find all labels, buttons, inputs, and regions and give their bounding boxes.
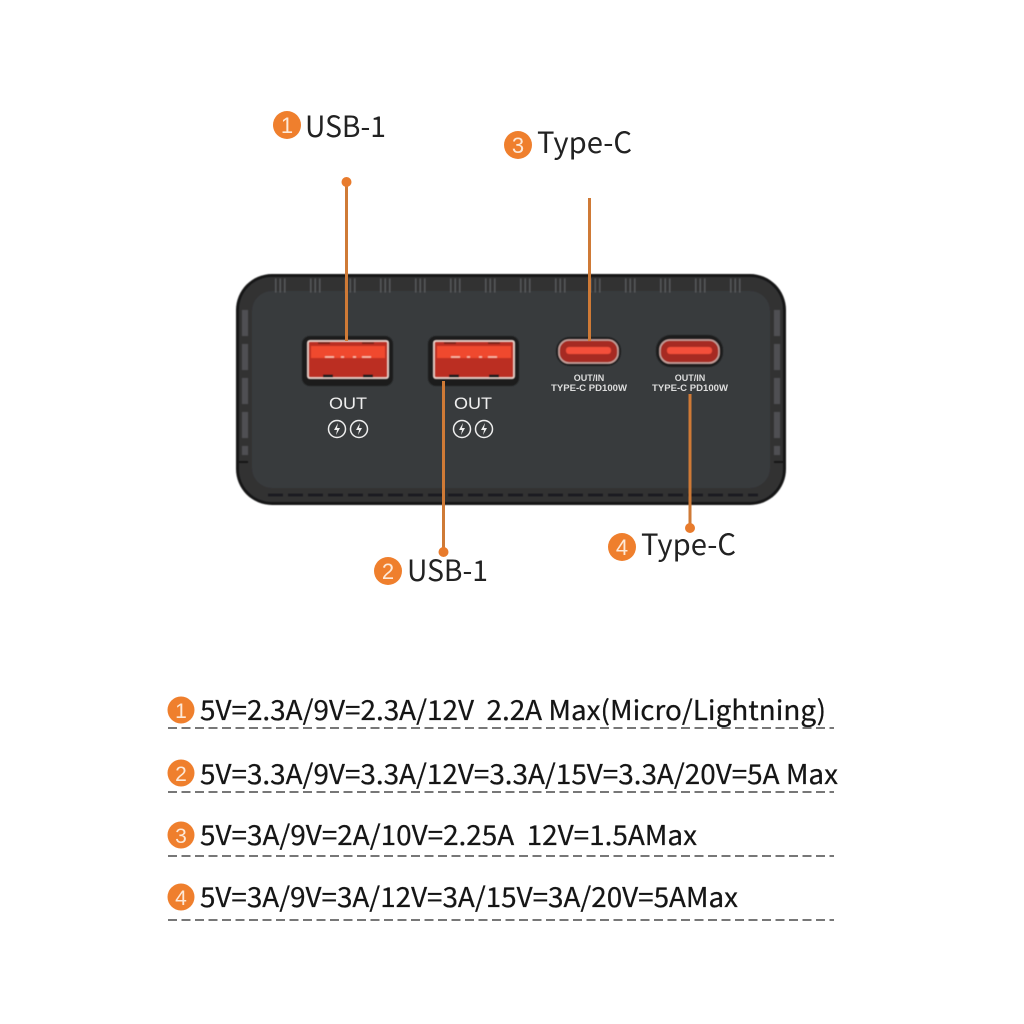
Type-C port label 1: TYPE-C PD100W [551,383,628,393]
label 2 USB-1 [374,548,488,590]
USB port 2 [428,336,519,386]
Type-C port 1 [556,337,621,366]
spec row 4 [168,876,834,920]
callout line 2 [438,381,448,557]
label 1 USB-1: USB-1 [305,104,386,146]
spec row 2: 2 [175,763,187,786]
callout line 4 [685,394,695,533]
Type-C port label 2: TYPE-C PD100W [652,383,729,393]
USB port label 2: OUT [454,394,492,413]
spec row 1: 1 [175,700,187,723]
spec row 3: 5V=3A/9V=2A/10V=2.25A 12V=1.5AMax [200,814,698,853]
Type-C port label 1: OUT/IN [574,373,604,383]
spec row 2: 5V=3.3A/9V=3.3A/12V=3.3A/15V=3.3A/20V=5A Max [200,753,839,792]
callout line 1 [342,177,352,341]
USB port label 1 [328,394,368,438]
Type-C port label 2: OUT/IN [675,373,705,383]
label 2 USB-1: 2 [382,559,394,584]
label 3 Type-C: Type-C [537,120,632,162]
label 1 USB-1: 1 [281,113,293,138]
spec row 3 [168,814,834,856]
label 4 Type-C: 4 [616,535,628,560]
label 3 Type-C: 3 [512,133,524,158]
spec row 3: 3 [175,825,187,848]
USB port label 2 [454,394,492,438]
spec row 4: 5V=3A/9V=3A/12V=3A/15V=3A/20V=5AMax [200,876,739,915]
Type-C port 2 [656,335,723,367]
label 2 USB-1: USB-1 [407,548,488,590]
power bank body [236,274,786,505]
spec row 1: 5V=2.3A/9V=2.3A/12V 2.2A Max(Micro/Lightning) [200,689,826,728]
label 4 Type-C: Type-C [641,522,736,564]
USB port label 1: OUT [329,394,367,413]
callout line 3 [588,198,591,341]
USB port 1 [302,336,393,386]
spec row 4: 4 [175,887,187,910]
